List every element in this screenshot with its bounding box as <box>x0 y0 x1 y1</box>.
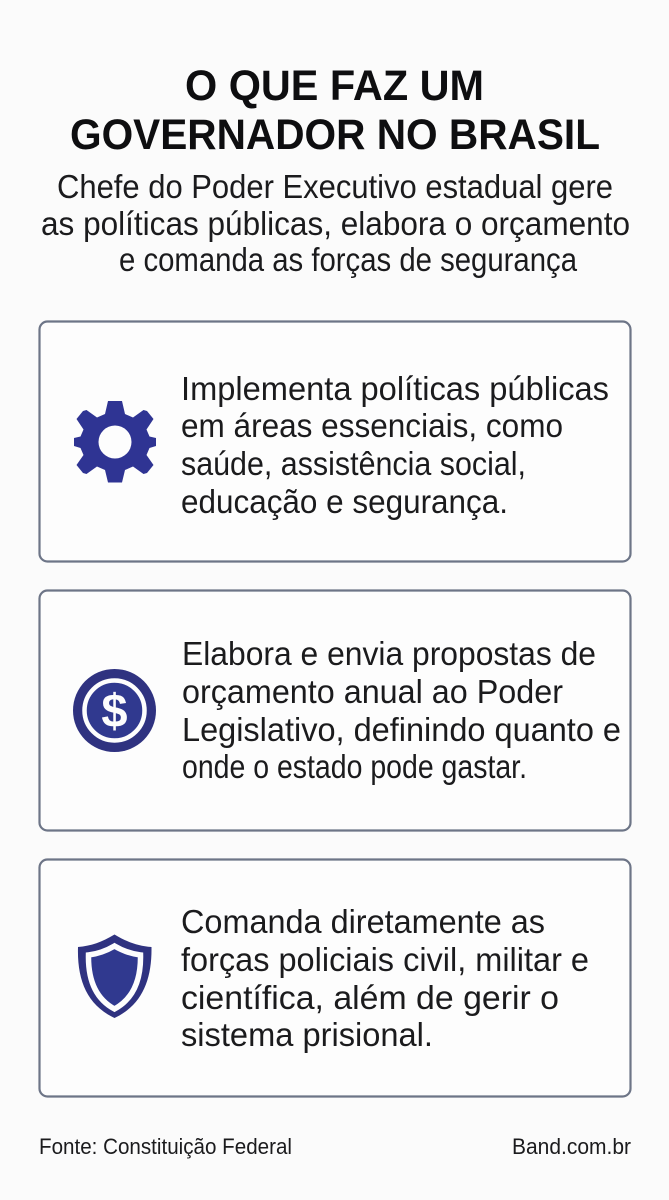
text: elabora: orçamento anual ao Poder <box>182 673 563 710</box>
text: elabora <box>182 635 621 785</box>
credit: Band.com.br <box>512 1134 631 1159</box>
text: implementa: saúde, assistência social, <box>181 445 526 482</box>
icon: gear <box>74 401 156 482</box>
text: implementa: Implementa políticas públicas <box>181 370 609 407</box>
source: Fonte: Constituição Federal <box>39 1134 292 1159</box>
title <box>70 62 600 159</box>
subtitle <box>41 168 630 278</box>
text: comanda: forças policiais civil, militar e <box>181 941 589 978</box>
icon: dollar coin: $ <box>101 684 128 737</box>
icon: shield <box>78 934 152 1018</box>
subtitle: as políticas públicas, elabora o orçamento <box>41 205 630 242</box>
icon: dollar coin <box>73 669 156 752</box>
text: implementa: em áreas essenciais, como <box>181 407 563 444</box>
title: O QUE FAZ UM <box>185 62 484 110</box>
text: comanda: científica, além de gerir o <box>181 979 559 1016</box>
panel: orçamento <box>40 590 630 830</box>
text: elabora: onde o estado pode gastar. <box>182 748 527 785</box>
panel: políticas públicas <box>40 322 630 562</box>
text: comanda: sistema prisional. <box>181 1016 433 1053</box>
subtitle: Chefe do Poder Executivo estadual gere <box>57 168 613 205</box>
text: elabora: Legislativo, definindo quanto e <box>182 711 621 748</box>
title: GOVERNADOR NO BRASIL <box>70 111 600 159</box>
panel: segurança <box>40 860 630 1096</box>
text: implementa: educação e segurança. <box>181 483 508 520</box>
text: comanda <box>181 903 589 1053</box>
subtitle: e comanda as forças de segurança <box>119 241 578 278</box>
text: elabora: Elabora e envia propostas de <box>182 635 596 672</box>
text: implementa <box>181 370 609 520</box>
text: comanda: Comanda diretamente as <box>181 903 545 940</box>
